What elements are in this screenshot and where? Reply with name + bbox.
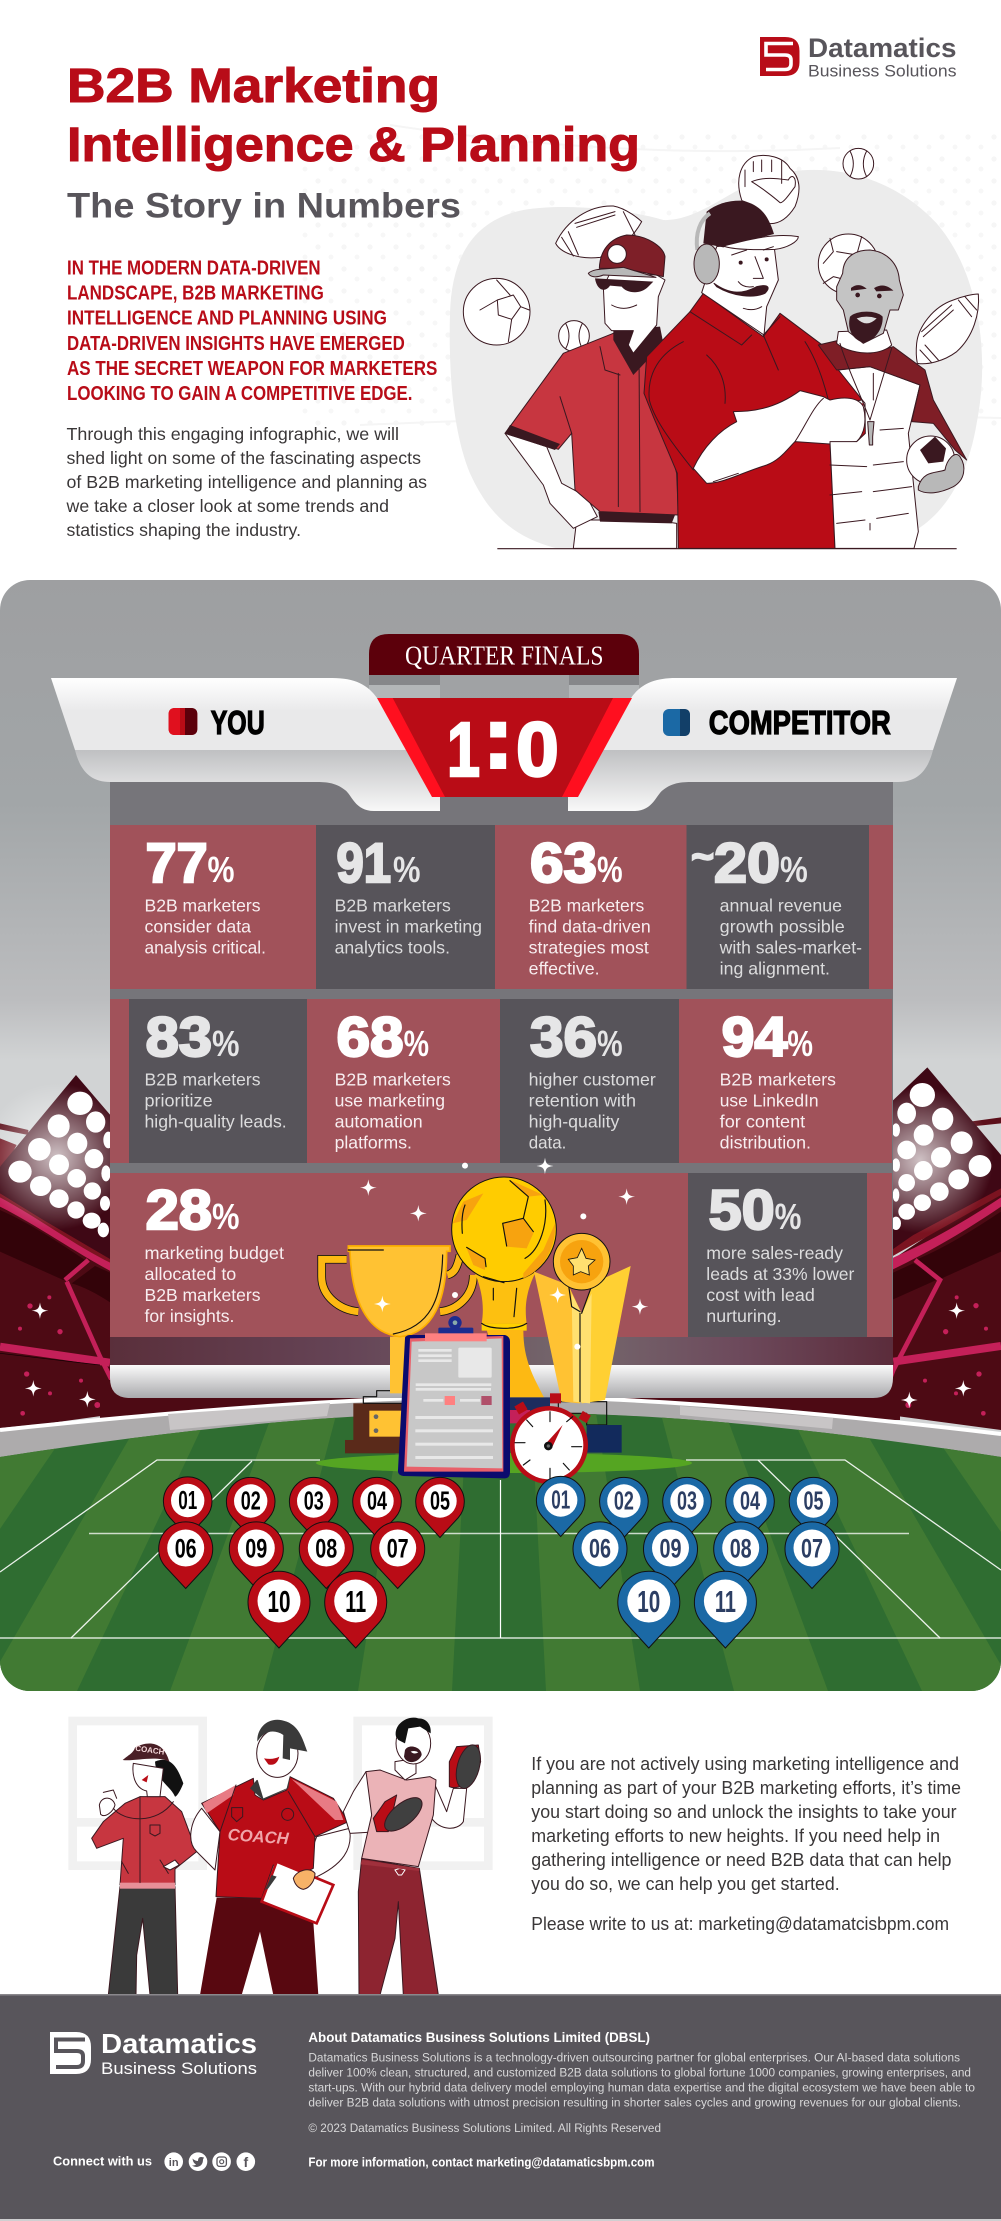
stat card: 28%: %	[212, 1196, 240, 1237]
title	[67, 60, 640, 172]
stat card: 83%: %	[212, 1023, 240, 1064]
stat card: 77%: 77	[146, 831, 208, 894]
stat card: 36%	[500, 999, 679, 1163]
team formation: competitor: 06	[589, 1534, 611, 1564]
team formation: competitor: 11	[715, 1584, 736, 1619]
stat card: 63%: 63	[530, 831, 597, 894]
stat card: 91%: analytics tools.	[335, 938, 450, 958]
stat card: ~20%: 20	[714, 831, 780, 894]
trophy: cup	[322, 1246, 473, 1453]
stat card: 77%: analysis critical.	[144, 938, 266, 958]
logo: Datamatics top right	[760, 33, 956, 80]
team colour chip: competitor	[663, 709, 690, 736]
subtitle: The Story in Numbers	[67, 186, 461, 226]
team formation: you: 11	[345, 1584, 366, 1619]
scoreboard wing: competitor	[568, 678, 957, 811]
stat card: 77%: %	[208, 849, 234, 890]
stat card: 94%: distribution.	[720, 1133, 811, 1153]
footer logo	[50, 2028, 257, 2078]
footer logo: Datamatics	[101, 2028, 257, 2059]
stat card: 94%: for content	[720, 1112, 805, 1132]
logo: Datamatics top right: Business Solutions	[808, 62, 956, 80]
connect with us and social icons: f	[243, 2154, 248, 2170]
stat card: 28%: allocated to	[144, 1264, 236, 1284]
stat card: 94%	[679, 999, 892, 1163]
team formation: you: 04	[367, 1485, 387, 1515]
background windows	[73, 1721, 488, 1866]
clipboard	[398, 1316, 510, 1478]
team colour chip: you	[169, 708, 197, 735]
intro headline text: IN THE MODERN DATA-DRIVEN	[67, 258, 321, 280]
call to action text: Please write to us at: marketing@datamatcisbpm.com	[531, 1913, 949, 1934]
stat card: 63%: strategies most	[529, 938, 649, 958]
intro headline text: LOOKING TO GAIN A COMPETITIVE EDGE.	[67, 383, 412, 405]
stat card: 28%: for insights.	[144, 1306, 234, 1326]
stat card: 50%: nurturing.	[706, 1306, 782, 1326]
stat card: 91%	[316, 825, 495, 989]
male coach	[191, 1720, 350, 1995]
team formation: you: 01	[178, 1485, 197, 1515]
team formation: competitor: 04	[740, 1485, 760, 1515]
stat card: 36%: %	[597, 1023, 623, 1064]
stat card: 36%: retention with	[529, 1091, 636, 1111]
stand barrier	[0, 1396, 1001, 1461]
green podium ellipse	[316, 1453, 692, 1473]
about text	[308, 2030, 975, 2135]
team formation: you: 02	[241, 1485, 261, 1515]
stat card: 91%: invest in marketing	[335, 917, 482, 937]
about text: deliver 100% clean, structured, and customized B2B data solutions to global fortune 1000 companies, growing enterprises, and	[308, 2066, 971, 2080]
intro headline text: DATA-DRIVEN INSIGHTS HAVE EMERGED	[67, 333, 405, 355]
stat card: ~20%: ~	[692, 838, 714, 876]
stat card: 50%	[688, 1173, 867, 1337]
intro body text: statistics shaping the industry.	[66, 520, 301, 540]
dim glass strip	[110, 1337, 893, 1365]
stat card: 68%	[307, 999, 500, 1163]
stat card: 94%: B2B marketers	[720, 1070, 836, 1090]
team formation: you: 03	[304, 1485, 324, 1515]
stat card: 50%: more sales-ready	[706, 1243, 843, 1263]
tab: quarter finals: QUARTER FINALS	[405, 640, 604, 670]
stat card: 91%: 91	[336, 831, 391, 894]
contact line: For more information, contact marketing@datamaticsbpm.com	[308, 2155, 654, 2169]
stat card: 28%: 28	[146, 1178, 212, 1241]
stands and floodlight right	[817, 1067, 1001, 1430]
tab: quarter finals	[369, 634, 639, 698]
stat card: 83%	[129, 999, 307, 1163]
scoreboard wing: competitor: COMPETITOR	[709, 704, 891, 741]
about text: About Datamatics Business Solutions Limited (DBSL)	[308, 2030, 650, 2045]
balls and glove	[463, 148, 979, 364]
intro body text: Through this engaging infographic, we will	[66, 424, 399, 444]
stat card: ~20%: annual revenue	[720, 896, 842, 916]
team formation: competitor: 09	[660, 1534, 682, 1564]
title: Intelligence & Planning	[67, 119, 640, 172]
connect with us and social icons: Connect with us	[53, 2155, 152, 2169]
stat card: 94%: %	[787, 1023, 813, 1064]
footer panel	[0, 1994, 1001, 2221]
stat card: 63%: %	[597, 849, 623, 890]
call to action text: you start doing so and unlock the insights to take your	[531, 1801, 957, 1822]
scoreboard frame	[110, 782, 893, 1342]
baseball coach	[505, 235, 678, 548]
stat card: 83%: high-quality leads.	[144, 1112, 287, 1132]
stands and floodlight left	[0, 1075, 133, 1430]
male coach: COACH	[227, 1825, 290, 1848]
stat row 3	[110, 1173, 892, 1337]
stat card: 63%	[495, 825, 686, 989]
team formation: you: 06	[175, 1534, 197, 1564]
team formation: competitor	[536, 1476, 839, 1648]
title: B2B Marketing	[67, 60, 440, 113]
intro body text: shed light on some of the fascinating aspects	[66, 448, 421, 468]
coach with whistle	[818, 250, 967, 548]
stat card: ~20%: growth possible	[720, 917, 845, 937]
stat card: 28%: B2B marketers	[144, 1285, 261, 1305]
score badge: 0	[516, 707, 559, 793]
score badge: :	[484, 691, 512, 786]
woman coach: COACH	[135, 1744, 165, 1757]
trophies, clipboard and stopwatch	[322, 1158, 648, 1484]
stat card: 91%: %	[393, 849, 420, 890]
stat card: 68%: use marketing	[335, 1091, 445, 1111]
intro body text: we take a closer look at some trends and	[65, 496, 389, 516]
illustration: three coaches with clipboard	[73, 1718, 488, 1995]
stat card: 68%: platforms.	[335, 1133, 412, 1153]
about text: © 2023 Datamatics Business Solutions Limited. All Rights Reserved	[308, 2121, 661, 2135]
stat card: 50%: 50	[709, 1178, 775, 1241]
stat card: 28%: marketing budget	[144, 1243, 284, 1263]
stat card: 36%: data.	[529, 1133, 566, 1153]
footer logo: Business Solutions	[101, 2059, 257, 2078]
coach with punch pads	[343, 1718, 485, 1995]
stat card: 83%: prioritize	[144, 1091, 213, 1111]
call to action text: you do so, we can help you get started.	[531, 1873, 840, 1894]
stat row 1	[110, 825, 893, 989]
connect with us and social icons: in	[169, 2157, 179, 2169]
logo: Datamatics top right: Datamatics	[808, 33, 956, 63]
call to action text: planning as part of your B2B marketing efforts, it’s time	[531, 1777, 961, 1798]
team formation: competitor: 08	[730, 1534, 752, 1564]
stat card: 63%: find data-driven	[529, 917, 651, 937]
stat card: ~20%: with sales-market-	[719, 938, 862, 958]
illustration: three coaches	[450, 148, 982, 549]
stat card: 63%: B2B marketers	[529, 896, 645, 916]
team formation: you: 07	[387, 1534, 409, 1564]
stat card: 68%: %	[404, 1023, 429, 1064]
team formation: you: 08	[315, 1534, 337, 1564]
team formation: competitor: 03	[677, 1485, 697, 1515]
stat card: 50%: leads at 33% lower	[706, 1264, 855, 1284]
team formation: competitor: 10	[637, 1584, 660, 1619]
panel: stadium scoreboard	[0, 580, 1001, 1700]
stat card: 77%: consider data	[144, 917, 251, 937]
stat card: 36%: higher customer	[529, 1070, 656, 1090]
stat card: 28%	[110, 1173, 688, 1337]
stat card: ~20%	[686, 825, 869, 989]
trophy: star	[534, 1233, 631, 1453]
about text: start-ups. With our hybrid data delivery model employing human data expertise and the digital ecosystem we have been able to	[308, 2081, 975, 2095]
lower white rail	[110, 1365, 893, 1398]
stat card: 68%: automation	[335, 1112, 423, 1132]
strip of stand under the rail	[100, 1380, 900, 1420]
team formation: you: 10	[268, 1584, 290, 1619]
call to action text: gathering intelligence or need B2B data that can help	[531, 1849, 952, 1870]
stat card: 94%: 94	[722, 1005, 787, 1068]
stat card: 50%: cost with lead	[706, 1285, 815, 1305]
intro headline text: INTELLIGENCE AND PLANNING USING	[67, 308, 387, 330]
stat card: 68%: 68	[336, 1005, 404, 1068]
intro headline text	[67, 258, 437, 405]
football pitch	[0, 1414, 1001, 1691]
scoreboard wing: you: YOU	[211, 704, 265, 741]
sparkles	[360, 1158, 648, 1350]
stat card: 83%: B2B marketers	[144, 1070, 261, 1090]
about text: Datamatics Business Solutions is a technology-driven outsourcing partner for global enterprises. Our AI-based data solutions	[308, 2051, 960, 2065]
team formation: you: 05	[430, 1485, 450, 1515]
call to action text: marketing efforts to new heights. If you need help in	[531, 1825, 940, 1846]
connect with us and social icons	[53, 2152, 255, 2171]
stat card: ~20%: ing alignment.	[720, 959, 830, 979]
intro body text	[65, 424, 427, 540]
stat card: 68%: B2B marketers	[335, 1070, 451, 1090]
trophy: football	[452, 1177, 556, 1417]
stat card: 83%: 83	[146, 1005, 212, 1068]
team formation: competitor: 05	[804, 1485, 824, 1515]
call to action text: If you are not actively using marketing intelligence and	[531, 1753, 959, 1774]
scoreboard wing: you	[51, 678, 440, 811]
team formation: you	[159, 1477, 464, 1648]
intro headline text: AS THE SECRET WEAPON FOR MARKETERS	[67, 358, 437, 380]
stat card: 50%: %	[775, 1196, 801, 1237]
stat card: 36%: 36	[530, 1005, 597, 1068]
coach with headset	[644, 201, 865, 548]
stat card: 77%	[110, 825, 316, 989]
stat card: ~20%: %	[780, 849, 808, 890]
intro body text: of B2B marketing intelligence and planning as	[66, 472, 427, 492]
stat row 2	[110, 999, 892, 1163]
about text: deliver B2B data solutions with utmost precision resulting in shorter sales cycles and growing revenues for our global clients.	[308, 2096, 961, 2110]
stopwatch	[510, 1393, 591, 1484]
stat card: 94%: use LinkedIn	[720, 1091, 819, 1111]
team formation: competitor: 02	[614, 1485, 634, 1515]
team formation: competitor: 01	[551, 1484, 570, 1514]
call to action text	[531, 1753, 961, 1934]
stat card: 91%: B2B marketers	[335, 896, 451, 916]
score badge: 1	[447, 707, 480, 793]
team formation: you: 09	[245, 1534, 267, 1564]
team formation: competitor: 07	[801, 1534, 823, 1564]
stat card: 36%: high-quality	[529, 1112, 620, 1132]
stat card: 77%: B2B marketers	[144, 896, 261, 916]
intro headline text: LANDSCAPE, B2B MARKETING	[67, 283, 324, 305]
score badge	[377, 691, 632, 797]
stat card: 63%: effective.	[529, 959, 600, 979]
woman coach	[92, 1743, 197, 1995]
